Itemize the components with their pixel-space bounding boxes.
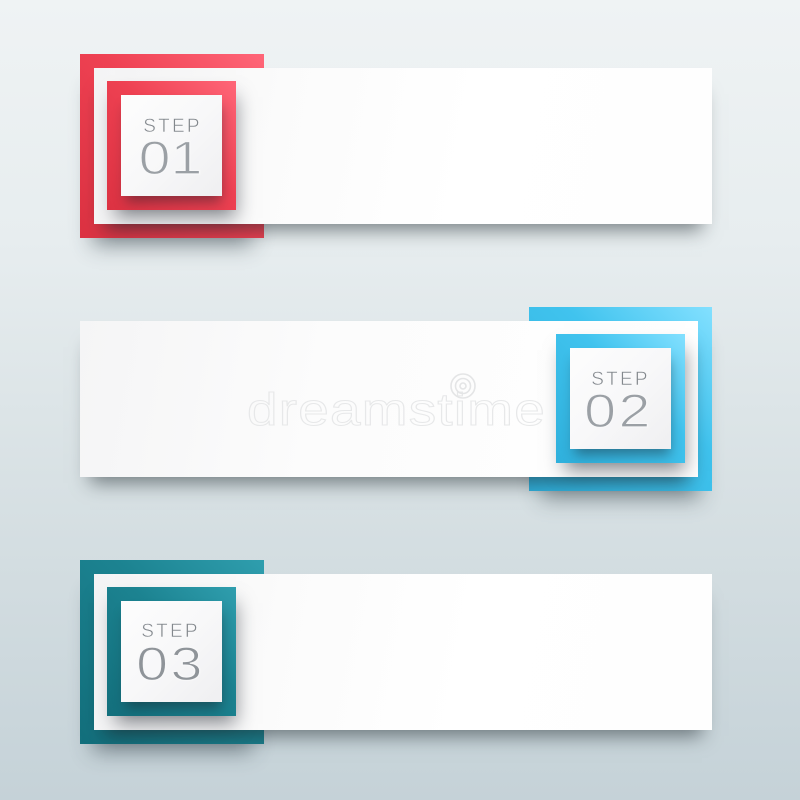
step 2 number: 02 bbox=[584, 384, 653, 437]
white banner 3 bbox=[94, 574, 712, 730]
blue outer square bbox=[529, 307, 712, 491]
step 3 label: STEP bbox=[141, 621, 200, 642]
step 3 card bbox=[121, 601, 222, 702]
step 1 card bbox=[121, 95, 222, 196]
step 2 label: STEP bbox=[591, 369, 650, 390]
panel: step 3 bbox=[78, 560, 715, 765]
step 2 card bbox=[570, 348, 671, 449]
white banner 1 bbox=[94, 68, 712, 224]
teal inner square bbox=[107, 587, 236, 716]
panel: step 2 bbox=[76, 307, 714, 512]
panel: step 1 bbox=[78, 54, 716, 260]
teal outer square bbox=[80, 560, 264, 744]
step 1 number: 01 bbox=[139, 131, 202, 184]
white banner 2 bbox=[80, 321, 698, 477]
watermark spiral icon bbox=[450, 373, 476, 399]
step 1 label: STEP bbox=[143, 116, 202, 137]
blue inner square bbox=[556, 334, 685, 463]
step 3 number: 03 bbox=[136, 637, 205, 690]
red inner square bbox=[107, 81, 236, 210]
red outer square bbox=[80, 54, 264, 238]
